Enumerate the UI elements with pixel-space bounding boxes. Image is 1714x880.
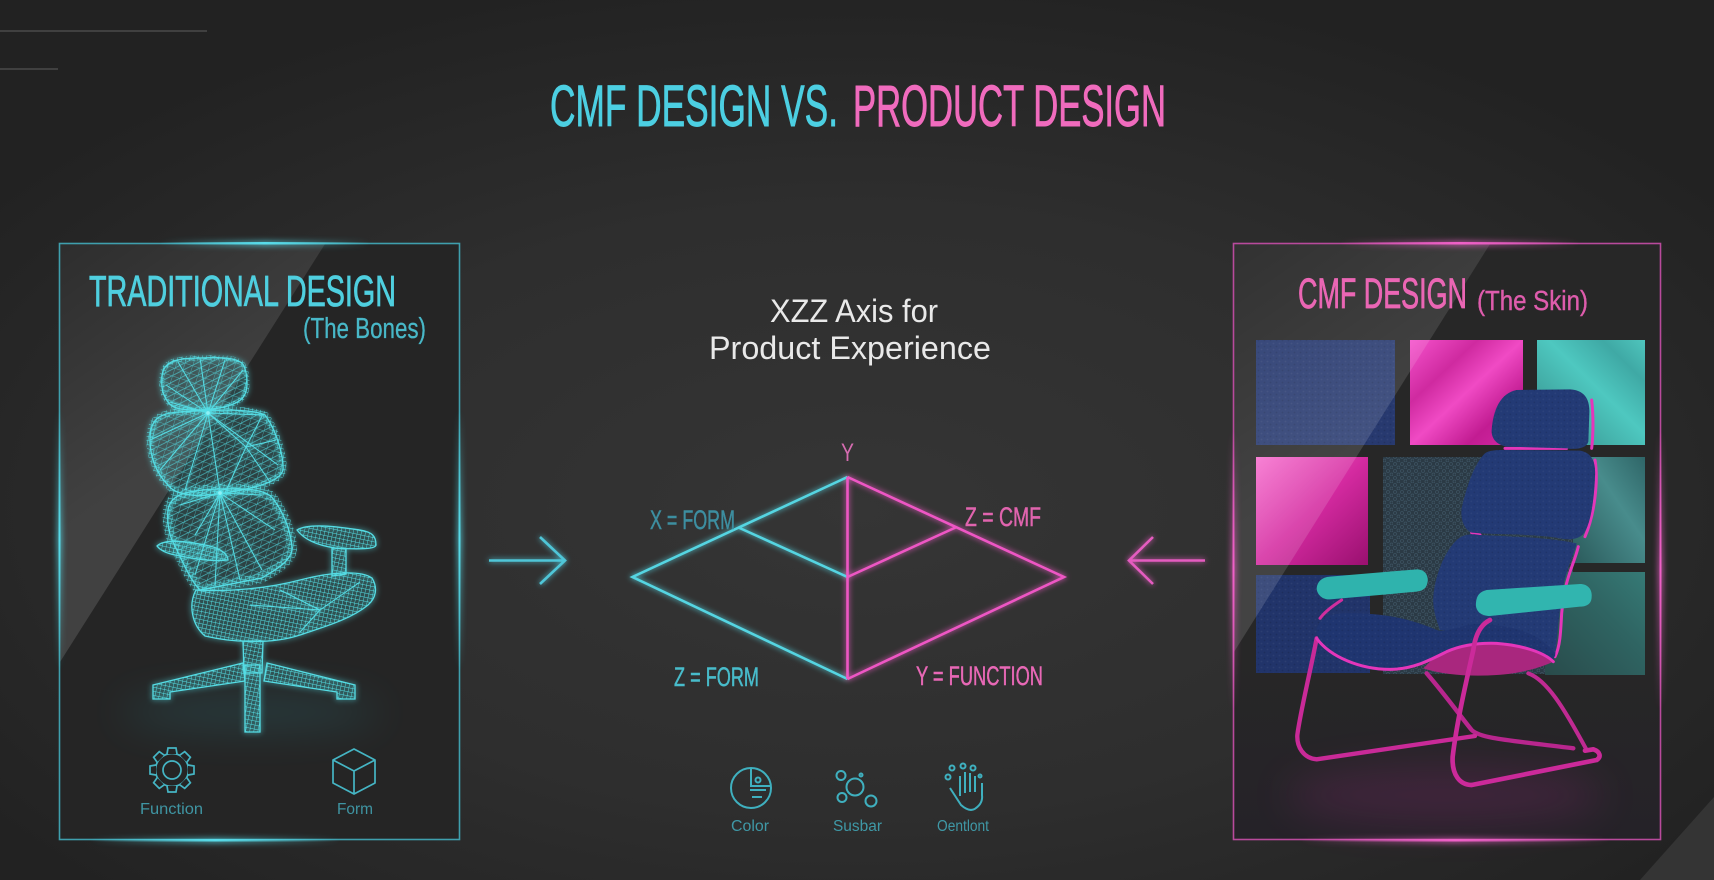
axis heading xyxy=(709,293,991,366)
heading: CMF design: CMF DESIGN xyxy=(1298,270,1467,318)
label: susbar: Susbar xyxy=(833,818,882,835)
axis diagram xyxy=(632,477,1064,679)
swatch: magenta metal xyxy=(1410,340,1523,445)
swatch: deep teal xyxy=(1545,572,1645,675)
label: color: Color xyxy=(731,818,769,835)
icon: material cluster xyxy=(836,771,876,806)
axis heading: XZZ Axis for xyxy=(770,293,938,329)
swatch: navy fabric xyxy=(1256,340,1395,445)
label: function: Function xyxy=(140,801,203,818)
icon: color xyxy=(731,768,771,808)
chair: CMF rendered xyxy=(1297,389,1600,785)
axis heading: Product Experience xyxy=(709,330,991,366)
title: Product Design: PRODUCT DESIGN xyxy=(853,74,1166,139)
arrow: right to center xyxy=(1129,537,1205,584)
swatch: deep navy xyxy=(1256,575,1370,673)
label: form: Form xyxy=(337,801,373,818)
chair wireframe xyxy=(150,358,376,732)
arrow: left to center xyxy=(489,537,565,584)
axis label: Y: Y xyxy=(841,439,854,467)
axis label: Z = Form: Z = FORM xyxy=(674,662,759,692)
panel: traditional design xyxy=(57,241,462,843)
axis label: X = Form: X = FORM xyxy=(650,505,735,535)
swatch: dim teal xyxy=(1573,457,1645,563)
subheading: the bones: (The Bones) xyxy=(303,313,426,345)
chair: right armrest xyxy=(1476,584,1592,616)
swatch: teal metal xyxy=(1537,340,1645,445)
panel: CMF design xyxy=(1231,241,1663,843)
icon: touch hand xyxy=(946,764,982,810)
heading: traditional design: TRADITIONAL DESIGN xyxy=(89,267,396,316)
icon: function gear xyxy=(150,748,194,792)
chair: left armrest xyxy=(1317,569,1428,599)
swatch: dark mesh xyxy=(1383,457,1573,674)
title xyxy=(550,74,1166,139)
subheading: the skin: (The Skin) xyxy=(1477,285,1588,316)
axis label: Z = CMF: Z = CMF xyxy=(965,502,1041,532)
axis label: Y = Function: Y = FUNCTION xyxy=(916,661,1043,691)
icon: form cube xyxy=(333,749,375,794)
title: CMF Design vs.: CMF DESIGN VS. xyxy=(550,74,838,139)
swatch: pink gloss xyxy=(1256,457,1368,565)
label: oentlont: Oentlont xyxy=(937,818,990,835)
